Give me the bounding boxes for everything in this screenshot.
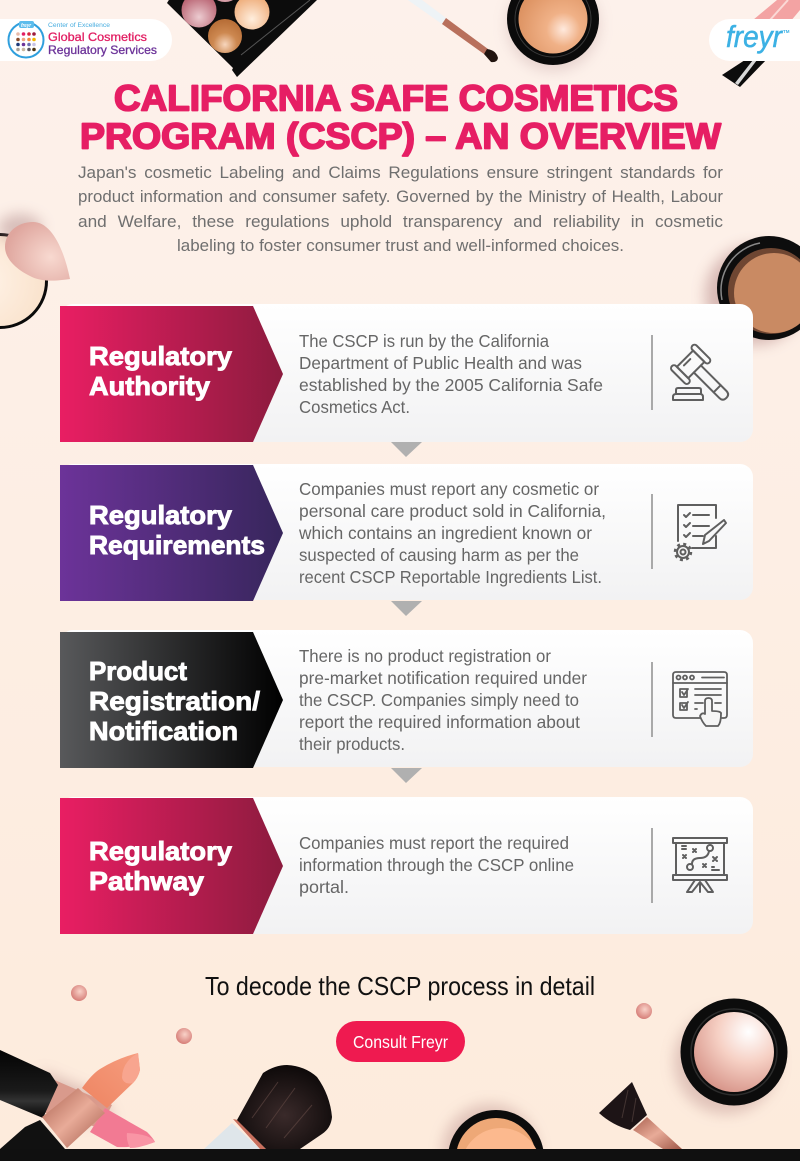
illustration: eyeshadow palette: [167, 0, 317, 77]
heading: [89, 836, 233, 896]
icon: web form with hand: [651, 662, 727, 737]
banner: [60, 465, 283, 601]
body text: Department of Public Health and was: [299, 353, 582, 373]
call to action text: To decode the CSCP process in detail: [205, 971, 595, 1001]
body text: established by the 2005 California Safe: [299, 375, 603, 395]
banner: [60, 798, 283, 934]
button: consult freyr: [336, 1021, 465, 1062]
illustration: powder brush: [204, 1065, 332, 1149]
heading: Product: [89, 656, 187, 686]
body text: suspected of causing harm as per the: [299, 545, 579, 565]
body text: pre-market notification required under: [299, 668, 587, 688]
heading: [89, 656, 260, 746]
illustration: lipsticks: [0, 1050, 155, 1149]
logo badge: [8, 21, 44, 58]
banner: [60, 306, 283, 442]
body text: Cosmetics Act.: [299, 397, 410, 417]
body text: Companies must report any cosmetic or: [299, 479, 599, 499]
body text: recent CSCP Reportable Ingredients List.: [299, 567, 602, 587]
body text: [298, 479, 606, 587]
heading: [89, 500, 265, 560]
intro paragraph: Japan's cosmetic Labeling and Claims Regulations ensure stringent standards for: [78, 163, 723, 182]
body text: information through the CSCP online: [299, 855, 574, 875]
icon: strategy board: [651, 828, 727, 903]
arrow: [391, 601, 422, 616]
body text: The CSCP is run by the California: [299, 331, 549, 351]
body text: report the required information about: [299, 712, 580, 732]
title: [80, 78, 721, 156]
panel: product registration / notification: [60, 630, 753, 768]
body text: their products.: [299, 734, 405, 754]
heading: Notification: [89, 716, 238, 746]
heading: Regulatory: [89, 341, 233, 371]
intro paragraph: and Welfare, these regulations uphold transparency and reliability in cosmetic: [78, 212, 724, 231]
body text: [299, 833, 574, 897]
illustration: bronzer compact right: [705, 236, 800, 345]
icon: gavel: [651, 335, 738, 411]
heading: [89, 341, 233, 401]
button: consult freyr: Consult Freyr: [353, 1032, 448, 1052]
logo text: regulatory services: Regulatory Services: [48, 43, 157, 57]
heading: Registration/: [89, 686, 260, 716]
heading: Pathway: [89, 866, 205, 896]
heading: Requirements: [89, 530, 265, 560]
heading: Regulatory: [89, 836, 233, 866]
arrow: [391, 768, 422, 783]
intro paragraph: product information and consumer safety. Governed by the Ministry of Health, Labour: [78, 187, 723, 206]
icon: checklist: [651, 494, 726, 569]
illustration: blush brush right: [599, 1082, 682, 1149]
logo text: global cosmetics: Global Cosmetics: [48, 30, 147, 44]
arrow: [391, 442, 422, 457]
body text: the CSCP. Companies simply need to: [299, 690, 579, 710]
panel: regulatory authority: [60, 304, 753, 442]
logo: freyr: [709, 19, 800, 61]
logo: freyr: TM: [783, 29, 790, 34]
title: CALIFORNIA SAFE COSMETICS: [114, 78, 678, 118]
intro paragraph: labeling to foster consumer trust and well-informed choices.: [177, 236, 624, 255]
heading: Authority: [89, 371, 211, 401]
illustration: eyeshadow brush: [405, 0, 498, 62]
logo badge: freyr: [21, 23, 32, 29]
heading: Regulatory: [89, 500, 233, 530]
illustration: bronze compact top: [507, 0, 599, 71]
illustration: pink compact bottom right: [674, 998, 788, 1114]
logo: Global Cosmetics Regulatory Services: [0, 19, 172, 61]
panel: regulatory pathway: [60, 797, 753, 934]
decorative beads: [71, 985, 652, 1044]
body text: Companies must report the required: [299, 833, 569, 853]
bottom band: [0, 1149, 800, 1161]
body text: which contains an ingredient known or: [298, 523, 592, 543]
logo: freyr: freyr: [726, 19, 784, 54]
illustration: lip gloss top right: [722, 0, 800, 87]
banner: [60, 632, 283, 768]
logo text: center of excellence: Center of Excellence: [48, 22, 110, 29]
panel: regulatory requirements: [60, 464, 753, 601]
title: PROGRAM (CSCP) – AN OVERVIEW: [80, 116, 721, 156]
illustration: puff and compact left: [0, 214, 70, 328]
body text: [299, 646, 587, 754]
intro paragraph: [78, 163, 724, 255]
illustration: tan compact bottom: [442, 1104, 544, 1161]
body text: personal care product sold in California,: [299, 501, 606, 521]
body text: [299, 331, 603, 417]
body text: There is no product registration or: [299, 646, 551, 666]
body text: portal.: [299, 877, 349, 897]
